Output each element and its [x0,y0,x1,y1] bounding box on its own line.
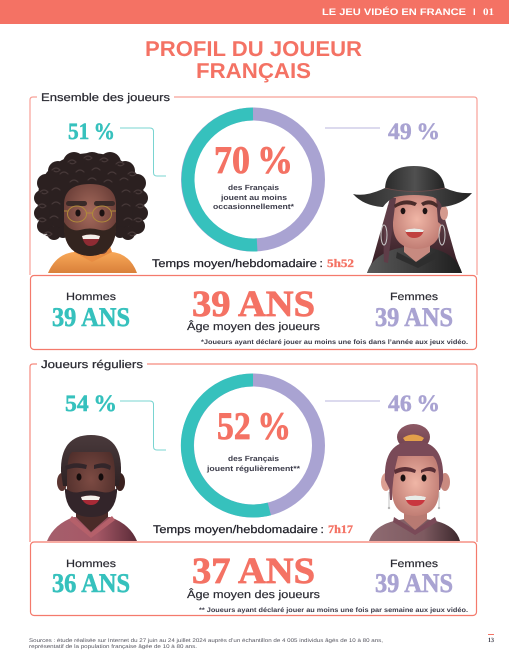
central stat: des Français [228,183,279,192]
men age: Hommes [66,558,116,570]
sources: Sources : étude réalisée sur Internet du 27 juin au 24 juillet 2024 auprès d’un échantillon de 4 005 individus âgés de 10 à 80 ans, [29,638,383,644]
women share 49%: 49 % [388,119,440,145]
women share 46% [325,391,440,417]
central stat: jouent au moins [220,193,287,202]
header band: I [473,7,476,18]
mean age: 37 ANS [192,551,315,592]
panel heading: Joueurs réguliers [41,359,144,371]
title: PROFIL DU JOUEUR [145,37,362,61]
panel: joueurs réguliers [30,359,477,542]
average weekly time: Temps moyen/hebdomadaire : [152,258,323,270]
mean age: 39 ANS [192,284,315,325]
men age: Hommes [66,291,116,303]
average weekly time: 7h17 [328,524,353,536]
page number [488,634,495,644]
panel: average age, regular players [30,542,476,616]
header band: LE JEU VIDÉO EN FRANCE [322,6,466,18]
women age: Femmes [390,558,438,570]
header band [0,0,509,24]
men age: 36 ANS [52,568,130,598]
avatar: man with curly hair [34,152,148,273]
donut chart: 52% [187,380,318,511]
panel: average age, all players [30,276,476,350]
central stat: 70 % [214,139,293,182]
women age [375,558,453,598]
central stat [206,405,300,473]
central stat [213,139,294,211]
women share 49% [325,119,440,145]
panel: ensemble des joueurs [30,92,477,275]
central stat: 52 % [217,405,291,448]
women age: Femmes [390,291,438,303]
women age: 39 ANS [375,302,453,332]
avatar: bearded man [47,435,137,541]
page number: 13 [488,637,495,644]
women age [375,291,453,332]
men age: 39 ANS [52,302,130,332]
central stat: occasionnellement* [213,202,294,211]
central stat: jouent régulièrement** [206,464,300,473]
panel heading: Ensemble des joueurs [41,92,171,104]
men age [52,558,130,598]
panel frame [30,97,477,275]
men share 54%: 54 % [65,391,117,417]
avatar: woman with bun [369,424,460,541]
avatar: woman with hat [353,166,472,273]
men share 51% [68,119,166,176]
women share 46%: 46 % [388,391,440,417]
men share 51%: 51 % [68,119,115,145]
title [145,37,362,83]
footnote: *Joueurs ayant déclaré jouer au moins une fois dans l’année aux jeux vidéo. [201,339,468,346]
average weekly time: Temps moyen/hebdomadaire : [153,524,324,536]
title: FRANÇAIS [196,59,311,83]
header band: 01 [483,7,494,18]
women age: 39 ANS [375,568,453,598]
panel frame [30,364,477,542]
sources: représentatif de la population française âgée de 10 à 80 ans. [29,644,197,650]
average weekly time: 5h52 [327,258,354,270]
footnote: ** Joueurs ayant déclaré jouer au moins une fois par semaine aux jeux vidéo. [199,607,468,614]
sources [29,638,383,650]
men age [52,291,130,332]
mean age: Âge moyen des joueurs [187,588,321,601]
men share 54% [65,391,166,450]
central stat: des Français [228,454,279,463]
donut chart: 70% [188,114,318,245]
mean age: Âge moyen des joueurs [187,320,321,333]
